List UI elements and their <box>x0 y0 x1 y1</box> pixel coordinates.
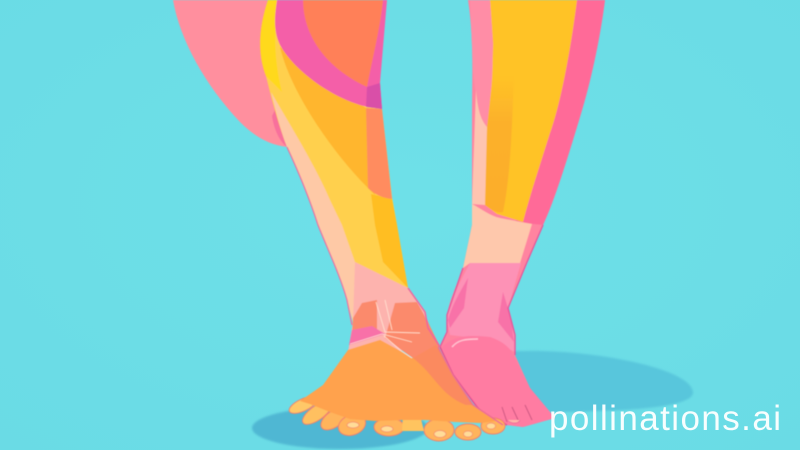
darker gold shade <box>485 75 514 212</box>
toes <box>287 393 505 441</box>
peach strip <box>472 90 487 205</box>
gold lower strip <box>371 194 408 288</box>
gold panel <box>280 47 375 195</box>
left leg <box>260 0 440 362</box>
coral thigh <box>303 0 383 87</box>
ankle pale pink <box>348 262 428 352</box>
left leg base <box>260 0 428 352</box>
ankle coral <box>352 300 440 362</box>
floor shadows <box>252 351 693 449</box>
watermark text: pollinations.ai <box>549 399 781 438</box>
pale pink upper strip <box>470 0 493 127</box>
right foot <box>442 336 555 427</box>
right leg <box>440 0 605 427</box>
toenails <box>347 422 496 438</box>
left foot <box>287 288 505 441</box>
toe strip between toes <box>402 415 424 431</box>
hot pink side <box>515 0 605 225</box>
right foot highlight <box>452 339 478 347</box>
gold centre <box>485 0 577 222</box>
right foot edge <box>440 347 507 425</box>
magenta band <box>275 0 387 109</box>
peach strip <box>271 92 372 322</box>
right leg base <box>440 0 605 427</box>
right toe lines <box>502 405 532 422</box>
foot edge <box>438 347 503 425</box>
bright yellow highlight <box>260 0 282 92</box>
orange strip <box>366 108 392 199</box>
thigh: pink hip <box>173 0 290 147</box>
purple overlap <box>366 83 382 109</box>
ankle shading <box>448 278 514 342</box>
tendon highlights <box>350 300 420 358</box>
pink stocking <box>447 263 521 352</box>
edge line <box>287 147 352 325</box>
foot coral shading <box>413 345 473 405</box>
foot body <box>300 340 497 423</box>
